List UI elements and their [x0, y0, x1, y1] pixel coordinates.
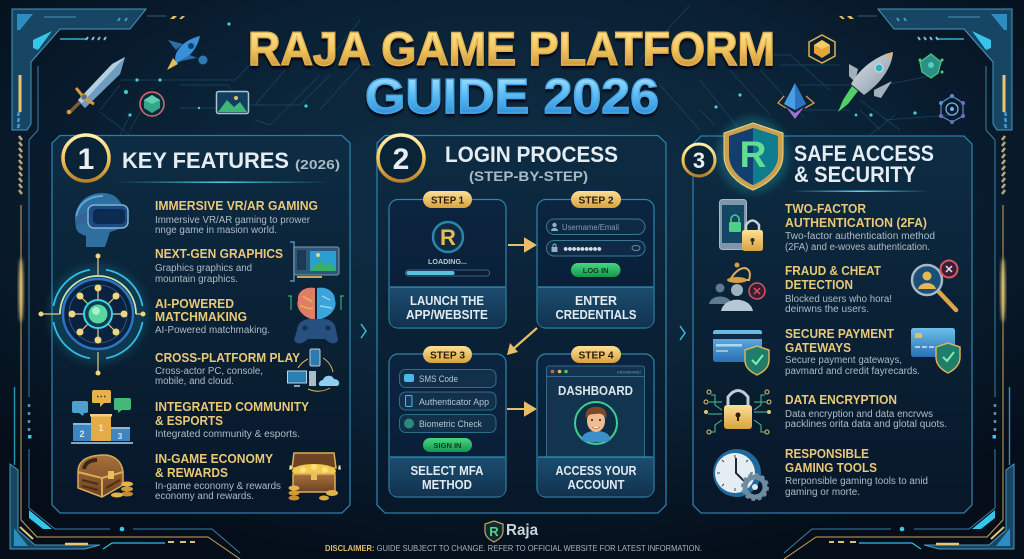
icon: card shield right: [911, 328, 960, 373]
card: step 2: [537, 200, 654, 328]
item: fraud detection: DETECTION: [785, 277, 853, 292]
icon: magnifier: [912, 260, 958, 310]
pill: step 1: [423, 191, 472, 208]
item: secure payment: Secure payment gateways,: [785, 355, 902, 366]
icon: silver rocket: [838, 52, 893, 112]
card: step 1: LOADING...: [428, 257, 467, 266]
item: secure payment: SECURE PAYMENT: [785, 326, 894, 341]
chevron connector 1: [361, 324, 366, 338]
footer logo: Raja: [506, 522, 538, 539]
side glow left: [19, 258, 23, 322]
icon: fraud users: [709, 262, 765, 311]
avatar: [575, 402, 617, 444]
icon: podium and chat: 2: [79, 429, 85, 439]
icon: crystal diamond: [778, 83, 814, 119]
item: secure payment: GATEWAYS: [785, 340, 851, 355]
option: SMS code: SMS Code: [419, 374, 458, 385]
item: community: INTEGRATED COMMUNITY: [155, 399, 309, 414]
title line 2: GUIDE 2026: [365, 70, 659, 124]
number badge 3: 3: [693, 148, 705, 173]
button: log in: LOG IN: [583, 266, 609, 275]
item: community: Integrated community & esports.: [155, 429, 300, 440]
footer logo: [485, 521, 538, 542]
number badge 1: 1: [78, 143, 94, 176]
card: step 1: LAUNCH THE: [410, 293, 484, 308]
dashboard window: DASHBOARD: [558, 383, 633, 398]
option: biometric check: Biometric Check: [419, 419, 482, 430]
icon: podium and chat: 1: [98, 423, 104, 433]
icon: brain and controller: [288, 288, 344, 343]
item: fraud detection: [785, 263, 892, 315]
panel: key features: [38, 135, 350, 513]
item: cross-platform: CROSS-PLATFORM PLAY: [155, 350, 300, 365]
item: two-factor: (2FA) and e-woves authentication.: [785, 242, 930, 253]
item: immersive VR/AR: Immersive VR/AR gaming to prower: [155, 215, 311, 226]
side glow right: [1001, 258, 1005, 322]
icon: green gem: [918, 54, 944, 78]
item: AI matchmaking: AI-POWERED: [155, 296, 234, 311]
icon: graphics card: [290, 242, 339, 281]
pill: step 1: STEP 1: [431, 194, 464, 206]
panel: safe access: [683, 117, 972, 513]
icon: shield R: [717, 117, 789, 193]
option: authenticator app: Authenticator App: [419, 397, 489, 408]
button: sign in: [423, 438, 472, 452]
panel: login process: [377, 135, 666, 513]
icon: AI network hub: [38, 254, 148, 376]
item: immersive VR/AR: [155, 198, 318, 236]
progress bar: [406, 270, 490, 276]
pill: step 2: STEP 2: [578, 194, 614, 206]
input: username: Username/Email: [562, 223, 619, 232]
item: community: & ESPORTS: [155, 413, 223, 428]
item: encryption: Data encryption and data encrvws: [785, 409, 933, 420]
heading: security: & SECURITY: [794, 162, 916, 187]
card: step 4: [537, 354, 654, 497]
icon: clock gear: [713, 449, 768, 500]
icon: hex cube: [809, 35, 835, 63]
item: encryption: packlines orita data and glotal quots.: [785, 419, 947, 430]
item: responsible gaming: [785, 446, 928, 498]
frame: top-left: [12, 9, 290, 397]
logo shield: R: [489, 524, 499, 539]
icon: treasure chest left: [78, 455, 133, 498]
item: secure payment: [785, 326, 920, 377]
card: step 2: ENTER: [575, 293, 618, 308]
item: responsible gaming: gaming or morte.: [785, 487, 860, 498]
heading note: (2026): [295, 157, 340, 172]
item: cross-platform: [155, 350, 300, 387]
icon: gem badge: [140, 92, 164, 116]
item: encryption: [785, 392, 947, 430]
heading: step-by-step: (STEP-BY-STEP): [469, 168, 588, 184]
item: community: [155, 399, 309, 440]
item: responsible gaming: Rerponsible gaming tools to anid: [785, 476, 928, 487]
card: step 2: CREDENTIALS: [556, 307, 637, 322]
disclaimer: DISCLAIMER: GUIDE SUBJECT TO CHANGE. REFER TO OFFICIAL WEBSITE FOR LATEST INFORMATION.: [325, 543, 702, 553]
item: two-factor: TWO-FACTOR: [785, 201, 867, 216]
item: economy: In-game economy & rewards: [155, 481, 281, 492]
item: next-gen graphics: NEXT-GEN GRAPHICS: [155, 246, 283, 261]
input: password: ●●●●●●●●●: [563, 244, 602, 254]
circuit background: [100, 5, 950, 135]
icon: phone lock: [720, 200, 763, 251]
dashboard window: DASHBOARD: [617, 370, 641, 374]
icon: treasure chest gold: [288, 453, 341, 500]
item: cross-platform: Cross-actor PC, console,: [155, 366, 263, 377]
card: step 4: ACCOUNT: [568, 477, 625, 492]
frame: top-right: [734, 9, 1012, 397]
item: AI matchmaking: AI-Powered matchmaking.: [155, 325, 270, 336]
option: SMS code: [400, 370, 496, 388]
card: step 3: [389, 354, 506, 497]
item: immersive VR/AR: nnge game in masion world.: [155, 225, 277, 236]
dashboard window: [546, 366, 644, 457]
icon: circuit lock: [704, 390, 771, 434]
logo R: R: [440, 225, 456, 250]
arrow: step 1 to 2: [508, 239, 535, 251]
item: responsible gaming: RESPONSIBLE: [785, 446, 869, 461]
icon: podium and chat: 3: [118, 432, 123, 441]
icon: credit card shield: [713, 330, 769, 375]
item: two-factor: Two-factor authentication method: [785, 231, 935, 242]
card: step 3: METHOD: [422, 477, 472, 492]
item: next-gen graphics: [155, 246, 283, 285]
heading: login process: LOGIN PROCESS: [445, 142, 618, 167]
item: encryption: DATA ENCRYPTION: [785, 392, 897, 407]
number badge 1: [63, 135, 109, 181]
item: economy: & REWARDS: [155, 465, 228, 480]
item: AI matchmaking: MATCHMAKING: [155, 309, 247, 324]
item: economy: [155, 451, 281, 502]
heading: safe access: SAFE ACCESS: [794, 141, 934, 166]
number badge 2: 2: [393, 143, 409, 176]
frame: bottom-right: [784, 205, 1014, 559]
item: secure payment: pavmard and credit fayrecards.: [785, 366, 920, 377]
pill: step 2: [571, 191, 621, 208]
item: responsible gaming: GAMING TOOLS: [785, 460, 877, 475]
icon: VR head: [75, 193, 128, 247]
option: biometric check: [400, 414, 496, 432]
heading: key features: KEY FEATURES: [122, 148, 289, 173]
card: step 1: [389, 200, 506, 328]
item: next-gen graphics: Graphics graphics and: [155, 263, 252, 274]
frame: bottom-left: [10, 205, 240, 559]
card: step 3: SELECT MFA: [410, 463, 484, 478]
item: economy: IN-GAME ECONOMY: [155, 451, 273, 466]
pill: step 4: [571, 346, 621, 363]
icon: blue rocket: [167, 36, 208, 70]
number badge 2: [378, 135, 424, 181]
option: authenticator app: [400, 392, 496, 410]
icon: network hex: [939, 94, 965, 124]
icon: podium and chat: [71, 390, 133, 444]
card: step 4: ACCESS YOUR: [556, 463, 637, 478]
item: two-factor: AUTHENTICATION (2FA): [785, 215, 927, 230]
pill: step 3: STEP 3: [430, 350, 465, 362]
title: [248, 22, 775, 124]
arrow: step 2 to 3: [507, 328, 537, 355]
icon: sword: [67, 57, 125, 114]
item: economy: economy and rewards.: [155, 491, 254, 502]
item: next-gen graphics: mountain graphics.: [155, 274, 238, 285]
icon: shield R: R: [740, 134, 766, 175]
item: AI matchmaking: [155, 296, 270, 336]
icon: devices and cloud: [288, 349, 339, 391]
card: step 1: APP/WEBSITE: [406, 307, 488, 322]
chevron connector 2: [680, 326, 685, 340]
icon: landscape image: [216, 92, 248, 114]
item: fraud detection: FRAUD & CHEAT: [785, 263, 881, 278]
pill: step 3: [423, 346, 472, 363]
title line 1: RAJA GAME PLATFORM: [248, 22, 775, 75]
number badge 3: [683, 144, 715, 176]
item: two-factor: [785, 201, 935, 253]
item: cross-platform: mobile, and cloud.: [155, 376, 234, 387]
button: sign in: SIGN IN: [434, 441, 461, 450]
arrow: step 3 to 4: [507, 403, 535, 415]
item: fraud detection: Blocked users who hora!: [785, 294, 892, 305]
item: fraud detection: deinwns the users.: [785, 304, 869, 315]
pill: step 4: STEP 4: [578, 350, 614, 362]
item: immersive VR/AR: IMMERSIVE VR/AR GAMING: [155, 198, 318, 213]
